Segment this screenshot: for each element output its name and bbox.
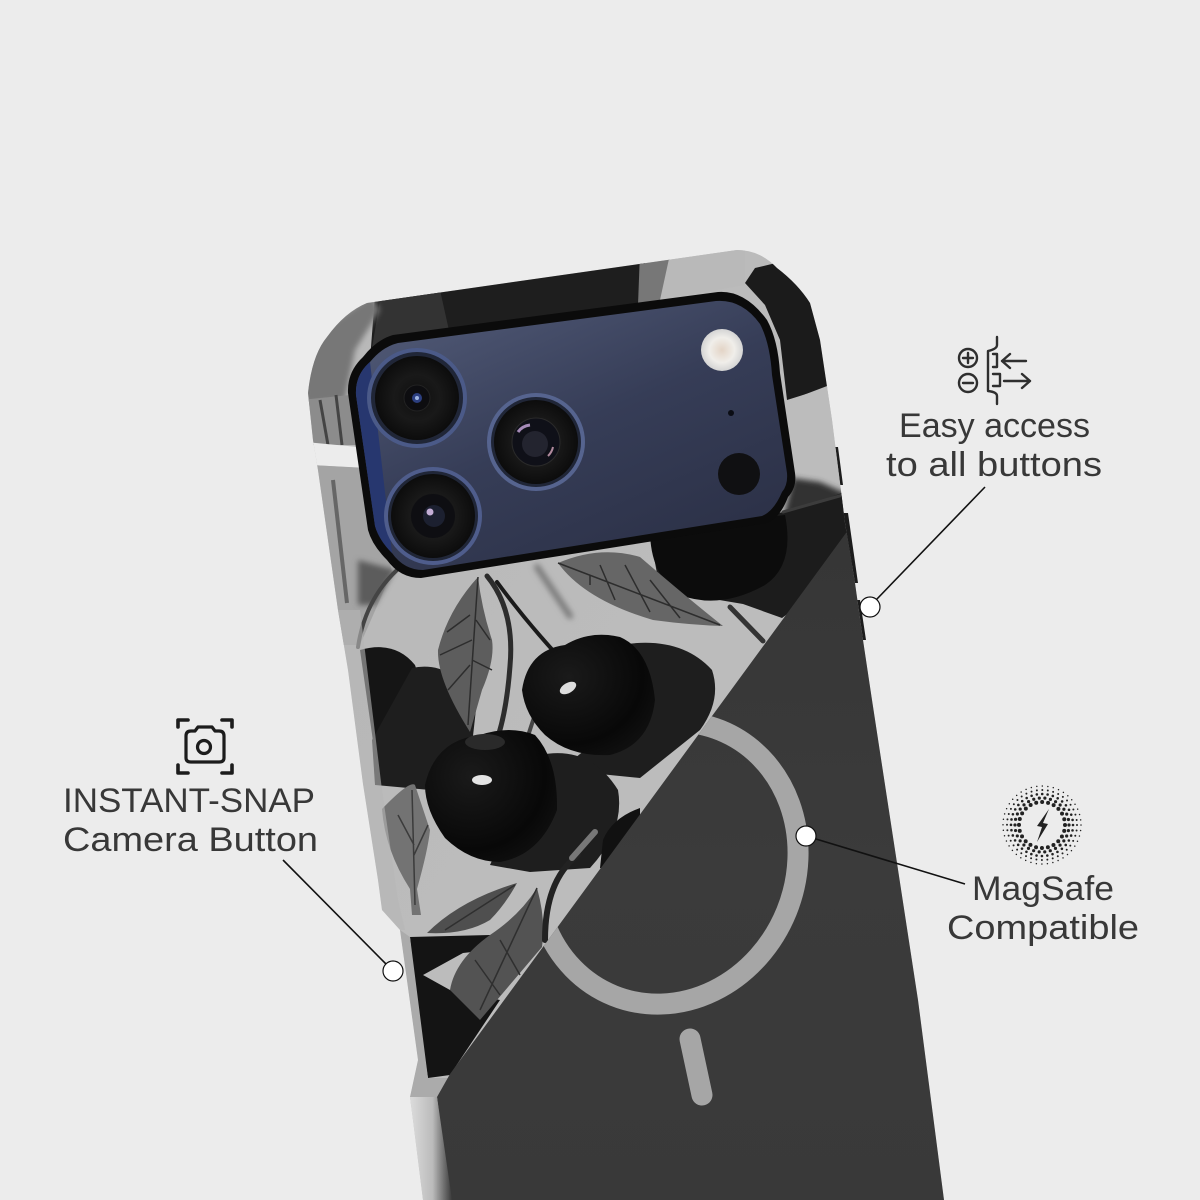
leaf: lower left [382, 784, 430, 915]
camera plateau [348, 292, 795, 578]
plateau frame [348, 292, 795, 578]
blue left edge [356, 362, 392, 553]
magsafe ring [544, 716, 809, 1015]
flash [701, 329, 743, 371]
microphone [728, 410, 734, 416]
cherry shadows [372, 643, 715, 872]
marker dot [860, 597, 880, 617]
callout: magsafe [796, 786, 1139, 947]
callout: instant-snap camera button [63, 720, 403, 981]
left translucent edge [338, 610, 391, 850]
leader line [806, 836, 965, 884]
lidar [718, 453, 760, 495]
label: camera button: INSTANT-SNAP [63, 782, 315, 820]
callout: easy access: to all buttons [886, 446, 1102, 484]
top right cherry [650, 515, 788, 601]
case print: cherries pattern [300, 240, 960, 1200]
icon: buttons [959, 337, 1030, 404]
stems [358, 495, 843, 940]
side buttons [832, 447, 866, 640]
case rim: dark print patches [300, 245, 850, 645]
lens: bottom left [384, 467, 482, 565]
icon: camera [178, 720, 232, 773]
phone case [300, 240, 960, 1200]
callout: easy access [860, 337, 1102, 617]
label: easy access: Easy access [899, 407, 1090, 445]
leader line [876, 487, 985, 600]
cherry: second [522, 635, 655, 755]
icon: magsafe charging [1003, 786, 1081, 864]
callout: magsafe: Compatible [947, 909, 1139, 947]
lightning bolt [1037, 809, 1049, 842]
clear edge strip [409, 1097, 452, 1200]
translucent edge, lower part [400, 930, 450, 1097]
bottom dark cherry and shadow [410, 935, 500, 1078]
leaf: top right [558, 552, 723, 626]
cherry: large [425, 730, 557, 862]
plateau plate [356, 301, 787, 570]
magsafe back panel [409, 533, 960, 1200]
callout: instant-snap camera button: Camera Button [63, 821, 318, 859]
magsafe alignment bar [690, 1039, 702, 1095]
dark shadow above diagonal, top right [650, 490, 860, 618]
far left cherry [360, 647, 416, 739]
leaves: bottom cluster [427, 883, 543, 1020]
lens: centre [487, 393, 585, 491]
label: magsafe: MagSafe [972, 870, 1114, 908]
marker dot [383, 961, 403, 981]
leaf: top centre [438, 577, 493, 732]
lens: top left [367, 348, 467, 448]
leader line [283, 860, 386, 964]
marker dot [796, 826, 816, 846]
